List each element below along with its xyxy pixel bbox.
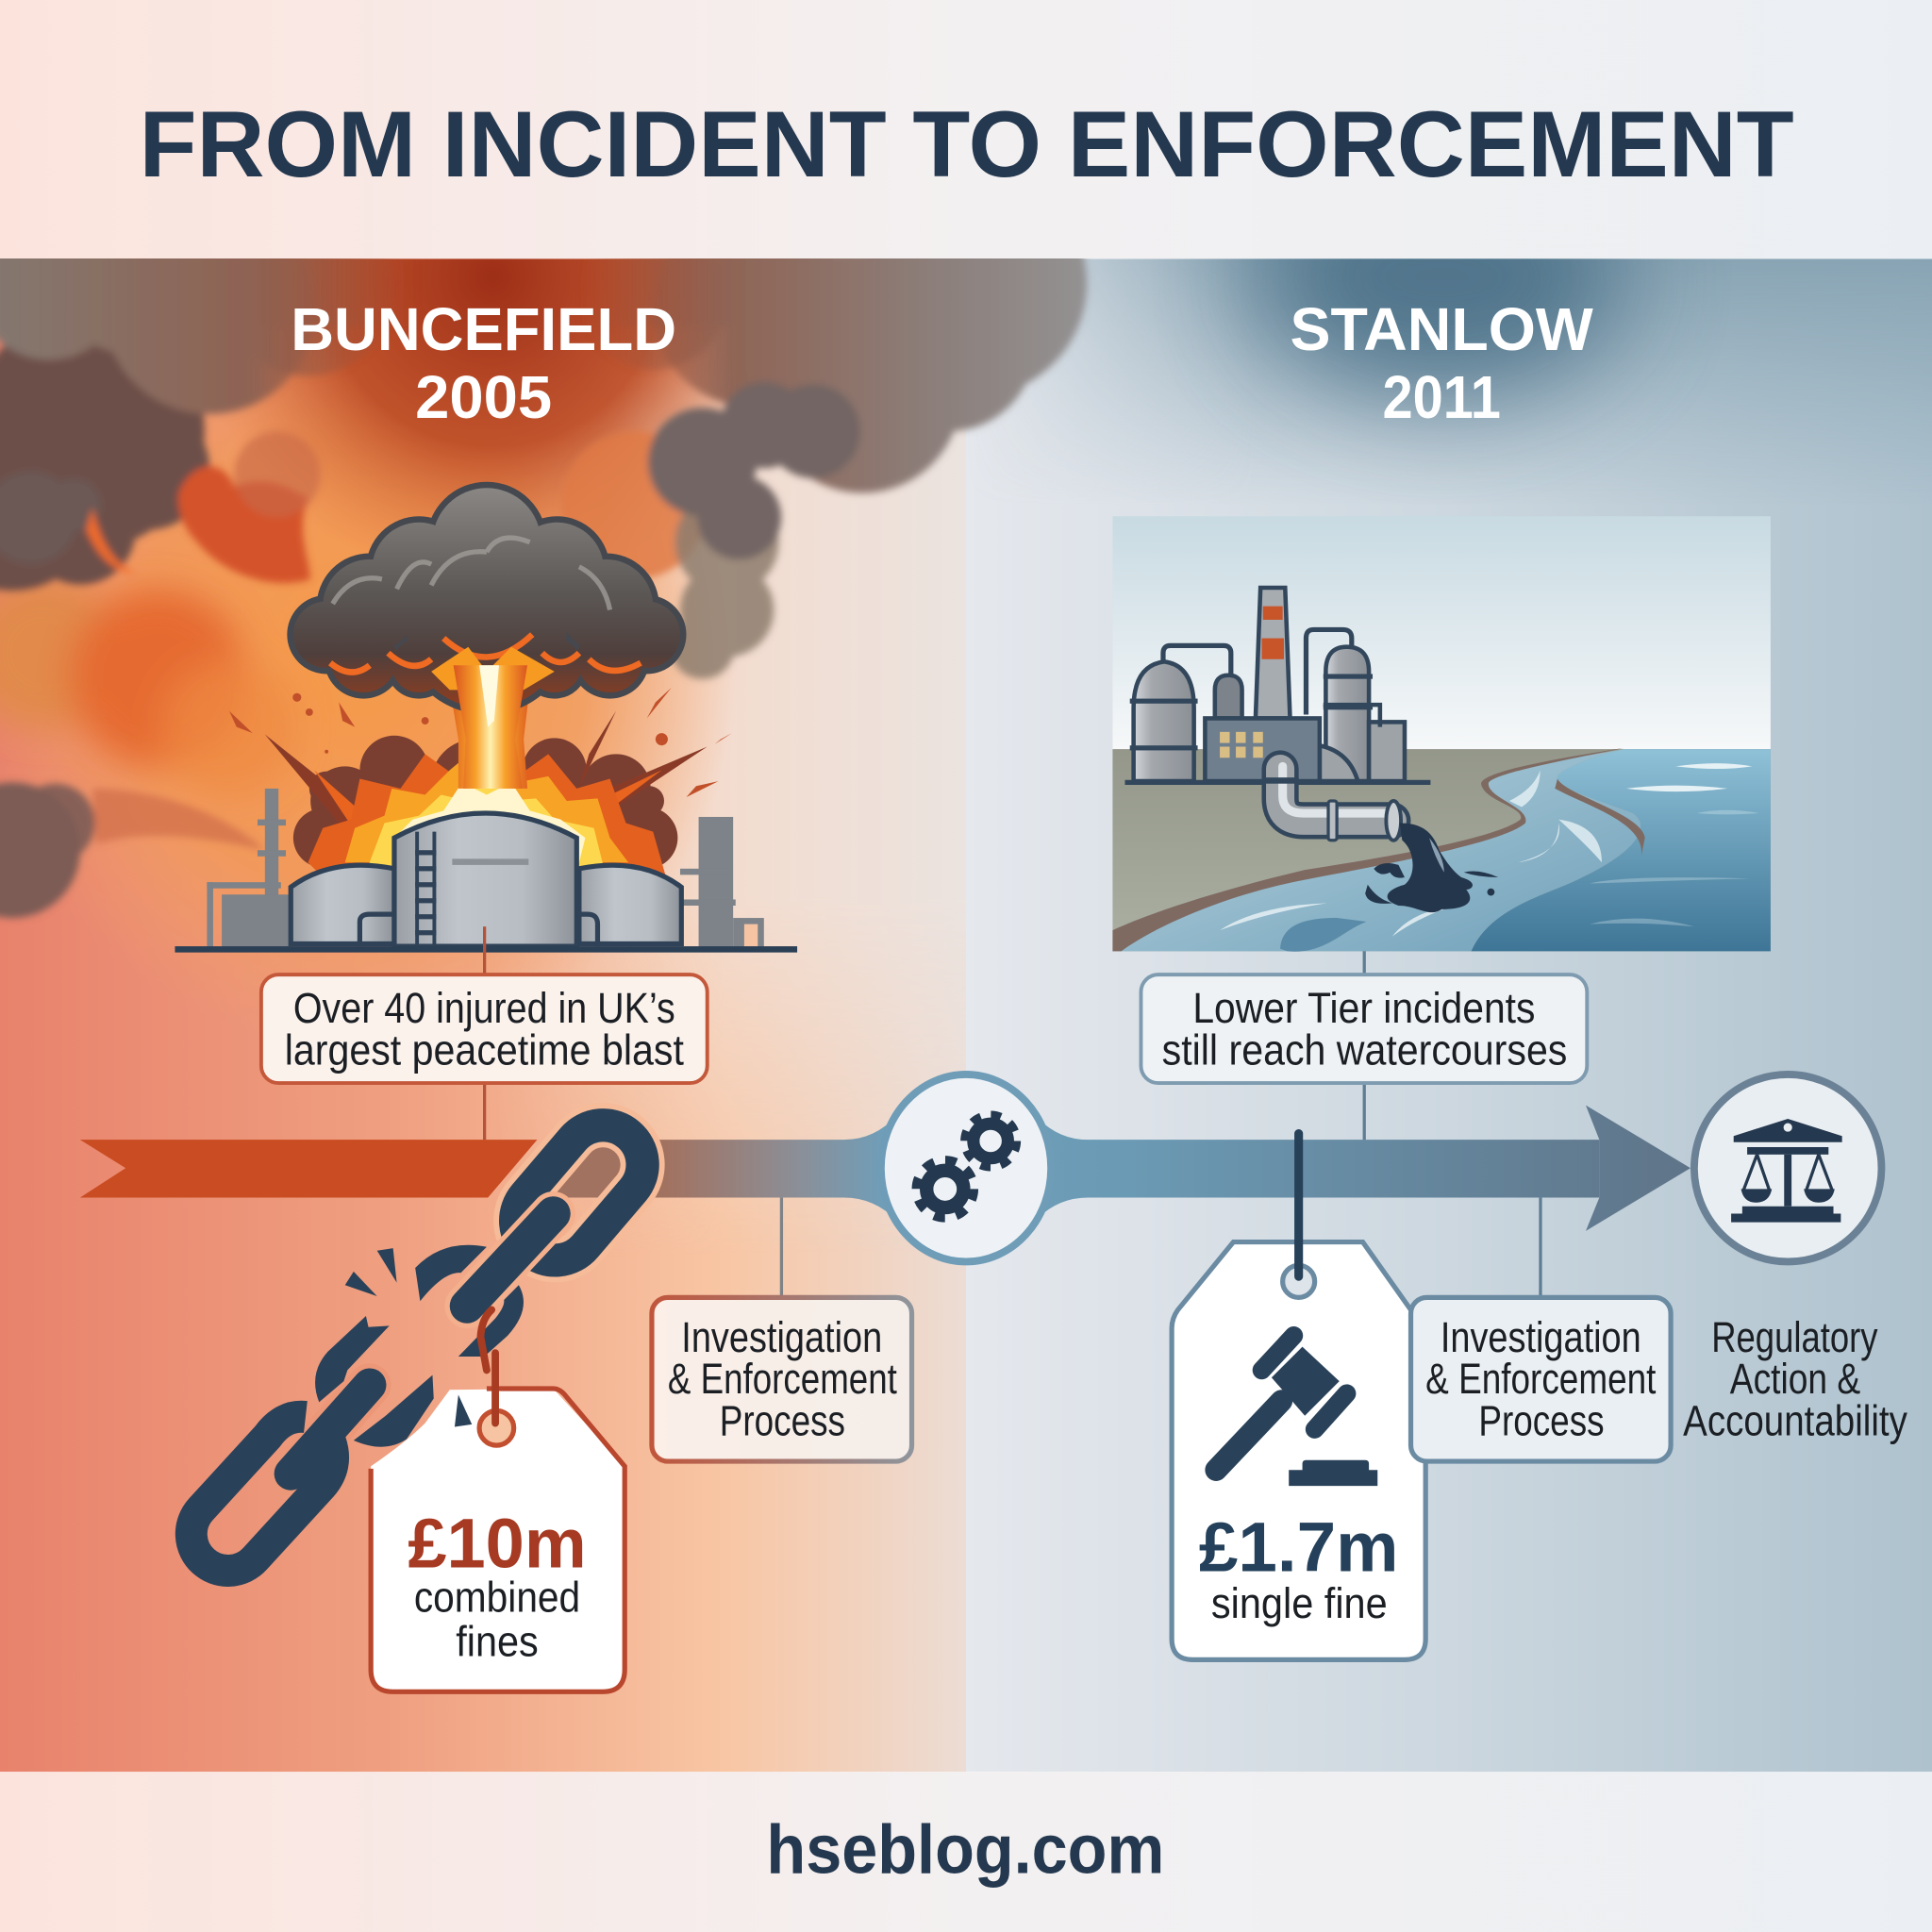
lower link: [192, 1417, 333, 1571]
discharge pipe: [1280, 769, 1392, 821]
top link: [500, 1109, 658, 1276]
chain centre bar: [467, 1214, 553, 1306]
box: Investigation process right: Process: [1478, 1397, 1605, 1445]
fine tag: £10m: fines: [456, 1617, 539, 1665]
right smoke light: [585, 258, 1091, 498]
flame stem: [446, 665, 532, 789]
fine tag: £1.7m: [1172, 1134, 1425, 1659]
right smoke dark: [648, 382, 860, 559]
fine tag: £10m: £10m: [408, 1504, 587, 1582]
upper left dark mass: [0, 313, 209, 591]
connector lines: [483, 926, 1542, 1297]
fine tag: £10m: [371, 1309, 625, 1691]
icon: gears circle: [881, 1074, 1051, 1261]
callout: Stanlow lower tier: still reach watercourses: [1162, 1025, 1567, 1074]
oil plume shadow: [1280, 918, 1366, 952]
water highlights: [1220, 763, 1759, 937]
icon: courthouse and scales circle: [1694, 1074, 1881, 1261]
title: FROM INCIDENT TO ENFORCEMENT: [140, 92, 1794, 197]
box: Investigation process left: Process: [720, 1397, 845, 1445]
tag hole: [1283, 1265, 1315, 1297]
right smoke tan: [671, 491, 778, 679]
box: Investigation process left: [652, 1297, 912, 1461]
box: Investigation process left: Investigation: [681, 1313, 882, 1361]
oil spill: [1388, 823, 1473, 912]
fireball base smoke: [293, 736, 677, 869]
break shards: [345, 1248, 397, 1296]
heading: Stanlow 2011: [1291, 295, 1593, 431]
red flame patch: [178, 466, 310, 583]
box: Investigation process right: [1411, 1297, 1671, 1461]
heading: Buncefield 2005: BUNCEFIELD: [291, 295, 676, 363]
fine tag: £10m: combined: [414, 1573, 580, 1621]
mushroom cap: [293, 488, 680, 708]
sea: [1472, 749, 1771, 951]
smoke clouds: [0, 258, 1091, 923]
upper left smoke band: [0, 258, 410, 419]
timeline red tail: [80, 1140, 537, 1198]
heading: Buncefield 2005: 2005: [415, 363, 552, 431]
timeline arrowhead: [1586, 1106, 1690, 1231]
skyline silhouettes: [207, 789, 764, 949]
label: Regulatory Action and Accountability: [1683, 1313, 1907, 1445]
blast spikes: [265, 734, 375, 838]
debris: [229, 688, 732, 797]
callout: Buncefield injuries: largest peacetime blast: [285, 1025, 684, 1074]
orange fire: [308, 733, 665, 887]
fine tag: £1.7m: £1.7m: [1199, 1507, 1398, 1586]
refinery: [1134, 588, 1405, 781]
icon: gavel: [1216, 1336, 1377, 1486]
label: Regulatory Action and Accountability: Action &: [1730, 1355, 1860, 1403]
riverbank: [1112, 748, 1624, 951]
footer site name: hseblog.com: [766, 1811, 1164, 1888]
icon: Stanlow refinery discharge scene: [1112, 516, 1771, 974]
timeline grey-blue shaft: [555, 1115, 1599, 1221]
box: Investigation process right: & Enforcement: [1425, 1355, 1657, 1403]
broken middle link pieces: [315, 1245, 524, 1447]
callout: Stanlow lower tier: [1141, 974, 1587, 1083]
callout: Buncefield injuries: [261, 974, 708, 1083]
callout: Buncefield injuries: Over 40 injured in UK’s: [293, 984, 675, 1032]
icon: broken chain: [192, 1109, 658, 1571]
tag string: [1295, 1134, 1302, 1276]
footer band: [0, 1772, 1932, 1932]
heading: Stanlow 2011: STANLOW: [1291, 295, 1593, 363]
heading: Buncefield 2005: [291, 295, 676, 431]
ground line: [175, 946, 797, 953]
heading: Stanlow 2011: 2011: [1382, 363, 1501, 431]
callout: Stanlow lower tier: Lower Tier incidents: [1192, 984, 1535, 1032]
fine tag: £1.7m: single fine: [1211, 1579, 1388, 1627]
header band: [0, 0, 1932, 258]
connector from picture: [1363, 951, 1366, 974]
storage tanks: [291, 813, 681, 946]
river: [1112, 749, 1641, 951]
tag hole and string: [479, 1411, 514, 1445]
chain lower bar: [291, 1385, 370, 1474]
panel: Stanlow background: [966, 160, 1932, 1772]
timeline arrow: [80, 1106, 1690, 1231]
icon: Buncefield explosion illustration: [175, 488, 797, 953]
label: Regulatory Action and Accountability: Regulatory: [1711, 1313, 1878, 1361]
box: Investigation process left: & Enforcement: [668, 1355, 897, 1403]
lower left orange and grey lobes: [0, 576, 295, 918]
box: Investigation process right: Investigation: [1441, 1313, 1641, 1361]
right orange patch: [560, 431, 708, 579]
panel: Buncefield background: [0, 258, 966, 1772]
